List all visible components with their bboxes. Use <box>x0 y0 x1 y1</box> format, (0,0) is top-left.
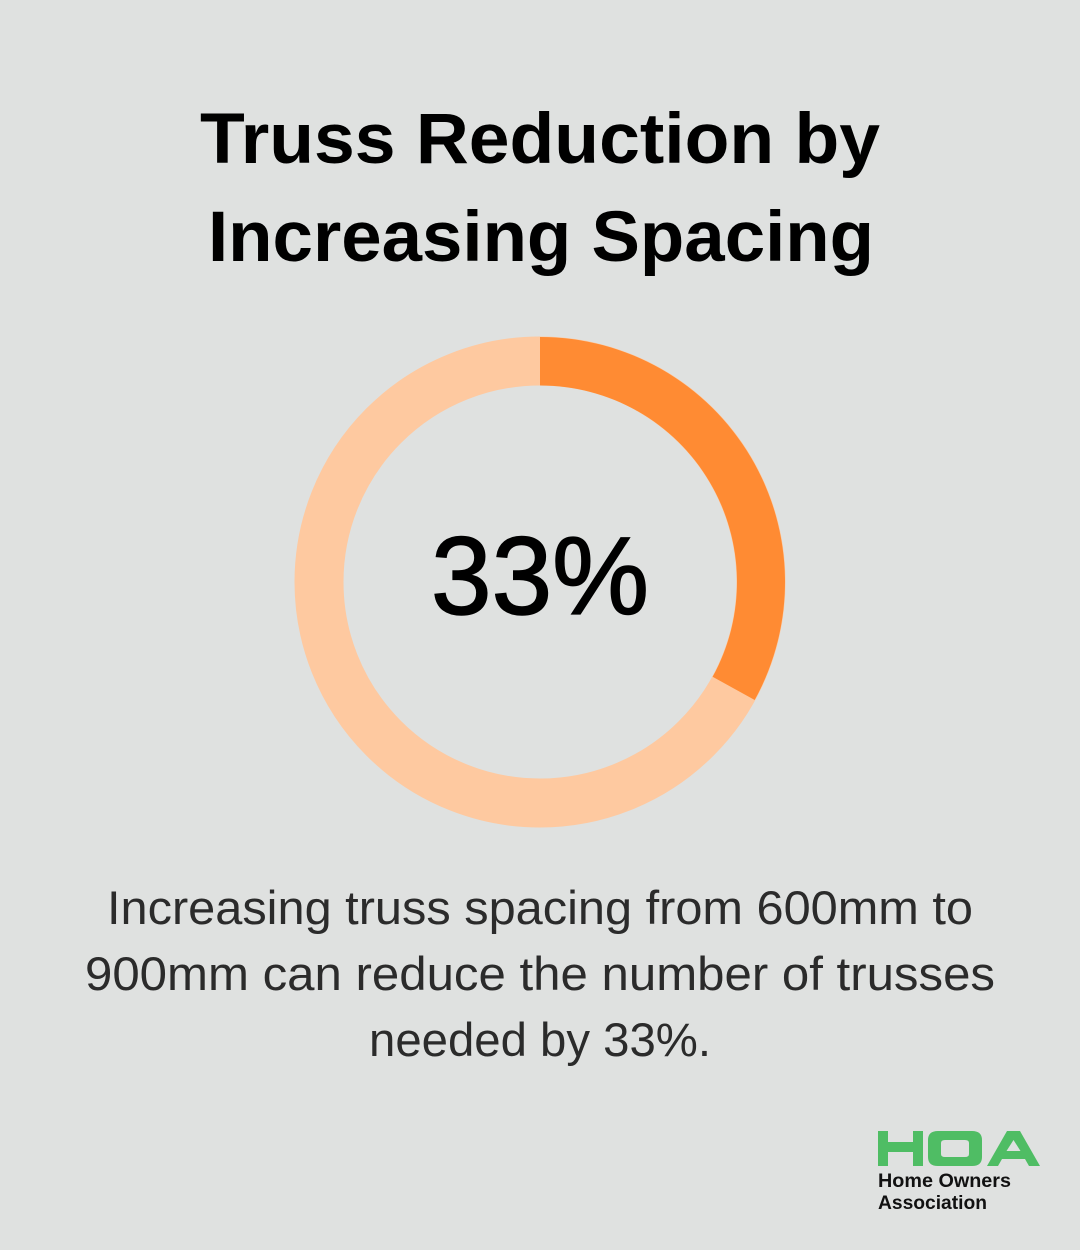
title: Increasing Spacing <box>208 198 874 277</box>
donut value: 33% <box>431 515 649 638</box>
description text: Increasing truss spacing from 600mm to <box>107 881 973 934</box>
description text: needed by 33%. <box>369 1013 711 1066</box>
description text <box>85 881 995 1066</box>
logo wordmark: Association <box>878 1192 987 1214</box>
title: Truss Reduction by <box>200 100 881 179</box>
description text: 900mm can reduce the number of trusses <box>85 947 995 1000</box>
donut chart: 33% <box>319 337 785 803</box>
logo letters HOA <box>878 1131 1040 1166</box>
logo: Home Owners Association <box>878 1131 1040 1214</box>
title <box>200 100 881 277</box>
logo wordmark <box>878 1170 1011 1214</box>
logo wordmark: Home Owners <box>878 1170 1011 1192</box>
